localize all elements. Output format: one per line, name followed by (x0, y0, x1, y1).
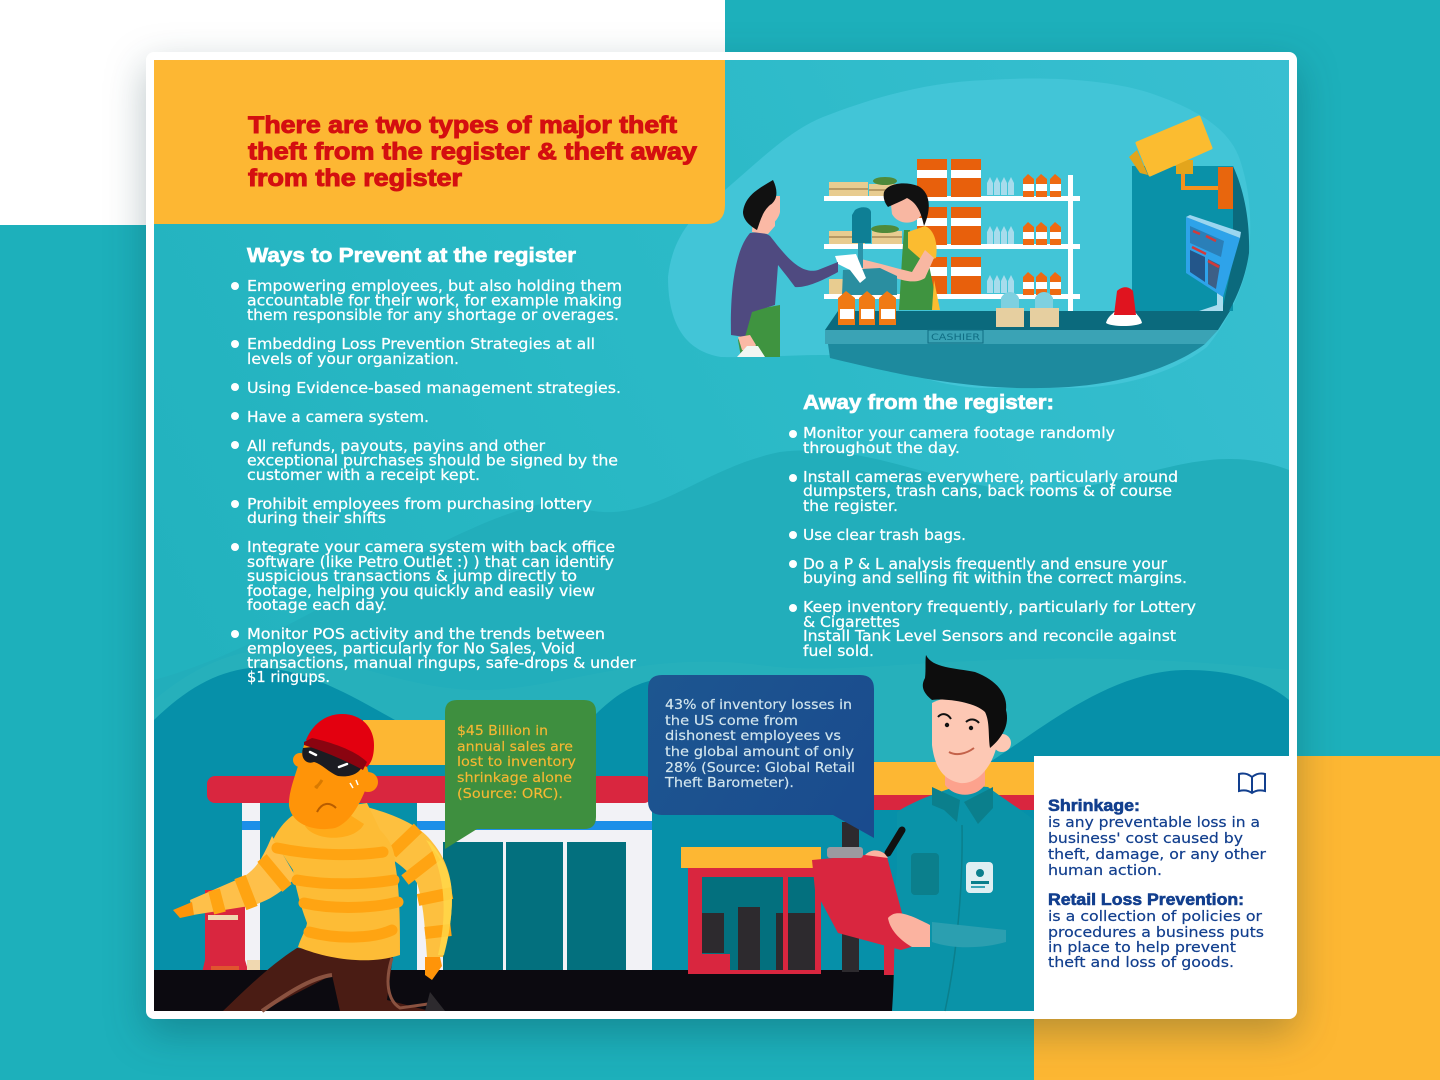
callout: 45 billion (445, 700, 596, 849)
bullet text: $1 ringups. (247, 668, 330, 686)
customer (731, 180, 838, 357)
panel: title banner (154, 60, 725, 224)
illustration: gas station right (681, 762, 1034, 975)
bullet text: suspicious transactions & jump directly to (247, 567, 577, 585)
callout: 45 billion: (Source: ORC). (457, 786, 563, 802)
definition: retail loss prevention: is a collection of policies or (1048, 909, 1262, 925)
bullet text: & Cigarettes (803, 613, 900, 631)
section heading: Away from the register: (803, 391, 1054, 414)
definition: retail loss prevention: theft and loss of goods. (1048, 955, 1234, 971)
bullet text: employees, particularly for No Sales, Void (247, 640, 575, 658)
illustration: thief (173, 714, 452, 1011)
cashier label: CASHIER (931, 333, 980, 343)
sunglasses (302, 746, 363, 776)
wheel (1017, 960, 1034, 1000)
definition: shrinkage: Shrinkage: (1048, 797, 1140, 815)
icon: open book (1239, 773, 1265, 793)
heading: from the register (248, 165, 462, 192)
callout: 45 billion: lost to inventory (457, 754, 576, 770)
background blob (668, 79, 1250, 388)
bullet text: levels of your organization. (247, 350, 459, 368)
paper bags (996, 292, 1059, 327)
definition: retail loss prevention: Retail Loss Prevention: (1048, 891, 1244, 909)
definition: retail loss prevention (1048, 891, 1264, 971)
bullet text: Empowering employees, but also holding them (247, 277, 622, 295)
callout: 43 percent: 43% of inventory losses in (665, 697, 852, 713)
bullet text: footage each day. (247, 596, 387, 614)
white card frame (146, 52, 1297, 1019)
bullet text: customer with a receipt kept. (247, 466, 480, 484)
cash register (835, 207, 897, 295)
bullet text: buying and selling fit within the correct margins. (803, 569, 1187, 587)
bullet text (803, 424, 1196, 660)
alarm siren (1106, 287, 1142, 326)
bullet text: Using Evidence-based management strategies. (247, 379, 621, 397)
neck and face (945, 760, 985, 795)
bullet text: Install Tank Level Sensors and reconcile against (803, 627, 1176, 645)
definition: shrinkage: is any preventable loss in a (1048, 815, 1260, 831)
definition: shrinkage (1048, 797, 1266, 879)
callout: 43 percent: dishonest employees vs (665, 728, 841, 744)
juice on counter (838, 291, 896, 325)
bullet text: footage, helping you quickly and easily view (247, 582, 595, 600)
text block: ways to prevent at the register (231, 244, 637, 686)
bullet text: fuel sold. (803, 642, 874, 660)
heading: There are two types of major theft (248, 112, 677, 139)
callout: 45 billion: shrinkage alone (457, 770, 572, 786)
water bottles (987, 177, 1014, 293)
bullet text (247, 277, 637, 686)
bullet text: transactions, manual ringups, safe-drops & under (247, 654, 637, 672)
text block: away from the register (789, 391, 1196, 660)
callout: 43 percent (648, 675, 874, 838)
bullet text: Do a P & L analysis frequently and ensure your (803, 555, 1168, 573)
back wall (1132, 166, 1249, 311)
cashier label (928, 330, 983, 343)
left arm (190, 836, 296, 915)
callout: 45 billion: annual sales are (457, 739, 573, 755)
clerk (856, 183, 940, 310)
bullets (231, 282, 239, 638)
bullet text: the register. (803, 497, 898, 515)
right arm (367, 807, 452, 957)
bullet text: Prohibit employees from purchasing lottery (247, 495, 592, 513)
face details (945, 723, 949, 727)
bullet text: All refunds, payouts, payins and other (247, 437, 546, 455)
bullet text: Monitor your camera footage randomly (803, 424, 1115, 442)
counter (825, 311, 1230, 388)
bullet text: accountable for their work, for example making (247, 292, 622, 310)
bullet text: dumpsters, trash cans, back rooms & of course (803, 482, 1172, 500)
legs (223, 948, 430, 1011)
callout: 43 percent: Theft Barometer). (664, 775, 794, 791)
section heading: Ways to Prevent at the register (247, 244, 576, 267)
bullet text: Install cameras everywhere, particularly around (803, 468, 1178, 486)
definition: shrinkage: business' cost caused by (1048, 831, 1243, 847)
callout: 43 percent: 28% (Source: Global Retail (665, 760, 855, 776)
definition: shrinkage: human action. (1048, 863, 1162, 879)
torso (273, 803, 400, 960)
bullet text: Monitor POS activity and the trends between (247, 625, 605, 643)
hair (923, 655, 1007, 748)
bullets (789, 430, 797, 612)
bullet text: Use clear trash bags. (803, 526, 966, 544)
bullet text: during their shifts (247, 509, 386, 527)
illustration: employee with clipboard (812, 655, 1034, 1011)
panel: teal background with waves (154, 60, 1289, 1011)
illustration: cashier scene (668, 79, 1250, 388)
definition: retail loss prevention: procedures a business puts (1048, 925, 1264, 941)
definition: shrinkage: theft, damage, or any other (1048, 847, 1266, 863)
juice bottles on shelves (1023, 174, 1061, 295)
bullet text: Embedding Loss Prevention Strategies at all (247, 335, 595, 353)
orange boxes (917, 159, 981, 294)
bullet text: Have a camera system. (247, 408, 429, 426)
callout: 43 percent: the US come from (665, 713, 798, 729)
callout: 43 percent: the global amount of only (665, 744, 854, 760)
uniform (892, 785, 1034, 1011)
bullet text: throughout the day. (803, 439, 960, 457)
bullet text: exceptional purchases should be signed by the (247, 452, 618, 470)
bullet text: them responsible for any shortage or overages. (247, 306, 619, 324)
bullet text: software (like Petro Outlet :) ) that can identify (247, 553, 614, 571)
bullet text: Keep inventory frequently, particularly for Lottery (803, 598, 1196, 616)
security camera (1129, 117, 1233, 209)
monitor (1186, 215, 1241, 315)
heading: theft from the register & theft away (248, 138, 698, 166)
shelves (824, 175, 1080, 311)
clipboard (812, 853, 911, 950)
id badge (966, 862, 993, 893)
heading (248, 112, 698, 192)
illustration: gas station left (201, 720, 652, 977)
red cap (306, 714, 374, 767)
head (289, 740, 370, 829)
panel: definitions (1034, 756, 1289, 1011)
crates (829, 177, 905, 294)
bullet text: Integrate your camera system with back office (247, 538, 615, 556)
callout: 45 billion: $45 Billion in (457, 723, 548, 739)
ground (154, 970, 1034, 1011)
definition: retail loss prevention: in place to help prevent (1048, 940, 1237, 956)
